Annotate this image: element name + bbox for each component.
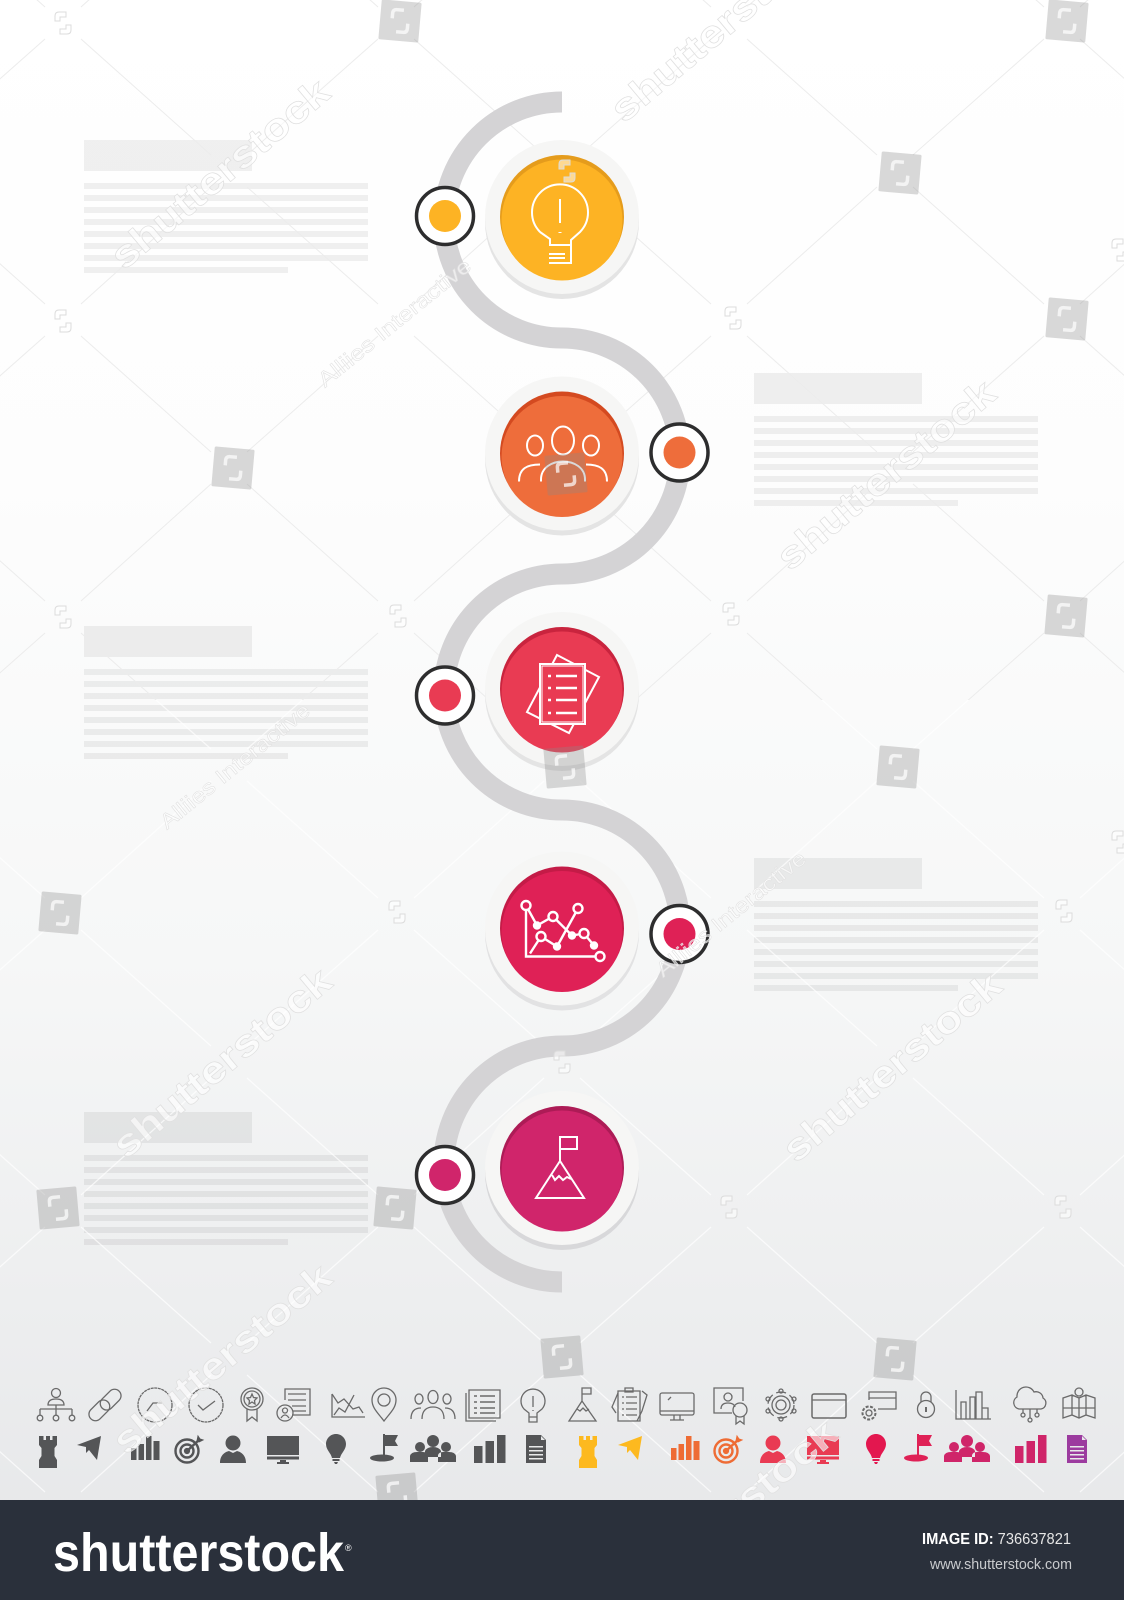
icon: bulb outline xyxy=(521,1389,545,1422)
icon: bar chart outline xyxy=(956,1390,991,1419)
icon: link xyxy=(86,1387,124,1423)
icon: profile list xyxy=(277,1389,310,1421)
watermark text: Alliies Interactive xyxy=(156,699,315,834)
marker 3 xyxy=(416,667,474,724)
icon: gear xyxy=(766,1389,796,1421)
step 4: chart xyxy=(485,852,639,1010)
icon: team magenta xyxy=(944,1435,990,1462)
watermark text: Alliies Interactive xyxy=(314,254,476,392)
watermark hooks xyxy=(55,12,1124,1218)
icon: award xyxy=(241,1388,263,1421)
icon: bars orange xyxy=(671,1436,700,1460)
icon: documents xyxy=(527,655,599,733)
icon: team outline xyxy=(411,1390,455,1419)
winding timeline path xyxy=(444,102,680,1282)
icon: plane yellow xyxy=(618,1436,642,1460)
icon: browser gear xyxy=(862,1392,896,1420)
watermark text: shutterstock xyxy=(105,959,341,1167)
icon: flag xyxy=(370,1434,398,1462)
step 1: idea xyxy=(485,140,639,299)
text placeholder 2 xyxy=(754,373,1038,506)
icon: location pin xyxy=(372,1388,396,1421)
icon: lightbulb xyxy=(532,184,588,263)
icon: bars xyxy=(131,1436,160,1460)
watermark text: shutterstock xyxy=(775,963,1011,1171)
icon: list pages xyxy=(466,1390,500,1421)
icon: trend circle xyxy=(138,1388,172,1422)
icon: browser xyxy=(812,1394,846,1418)
footer bar xyxy=(0,1500,1124,1600)
step 2: team xyxy=(485,376,639,536)
icon: document purple xyxy=(1067,1435,1087,1463)
icon: clipboard xyxy=(612,1388,647,1421)
icon: bulb red xyxy=(866,1434,886,1464)
footer logo: ® xyxy=(345,1543,352,1553)
watermark text: Alliies Interactive xyxy=(652,847,811,982)
icon: line chart xyxy=(522,901,604,961)
icon: lock xyxy=(918,1392,934,1418)
icon: document xyxy=(526,1435,546,1463)
icon: cloud network xyxy=(1014,1387,1046,1422)
coloured icon row xyxy=(579,1434,1087,1468)
icon: tower yellow xyxy=(579,1436,597,1468)
icon: target xyxy=(176,1436,203,1462)
icon: person red xyxy=(760,1436,786,1463)
icon: mountain flag xyxy=(536,1137,584,1198)
icon: monitor red xyxy=(807,1436,839,1464)
icon: mountain flag outline xyxy=(569,1388,596,1421)
watermark text: shutterstock xyxy=(769,371,1005,579)
marker 2 xyxy=(651,424,708,481)
marker 4 xyxy=(651,906,708,962)
icon: user certificate xyxy=(714,1388,747,1424)
icon: team xyxy=(410,1435,456,1462)
icon: monitor xyxy=(267,1436,299,1464)
icon: tower xyxy=(39,1436,57,1468)
step 3: documents xyxy=(485,612,639,771)
icon: org chart xyxy=(37,1388,75,1421)
image id: IMAGE ID: 736637821 xyxy=(922,1531,1071,1548)
outline icon row xyxy=(37,1387,1095,1424)
text placeholder 5 xyxy=(84,1112,368,1245)
solid grey icon row xyxy=(39,1434,546,1468)
icon: person xyxy=(220,1436,246,1463)
text placeholder 1 xyxy=(84,140,368,273)
text placeholder 3 xyxy=(84,626,368,759)
icon: flag red xyxy=(904,1434,932,1462)
watermark text: shutterstock xyxy=(105,1255,341,1463)
icon: three bars xyxy=(474,1435,506,1463)
marker 1 xyxy=(416,188,474,244)
footer logo: shutterstock xyxy=(53,1523,345,1583)
icon: map xyxy=(1063,1388,1095,1418)
icon: paper plane xyxy=(77,1436,101,1460)
step 5: goal xyxy=(485,1091,639,1250)
icon: desktop xyxy=(660,1393,694,1420)
icon: team xyxy=(519,426,607,482)
icon: check circle xyxy=(189,1388,223,1422)
watermark text: shutterstock xyxy=(103,70,339,278)
icon: target orange xyxy=(714,1436,742,1462)
website: www.shutterstock.com xyxy=(929,1556,1072,1573)
text placeholder 4 xyxy=(754,858,1038,991)
icon: line chart xyxy=(332,1394,365,1417)
icon: bulb xyxy=(326,1434,346,1464)
marker 5 xyxy=(416,1146,474,1204)
icon: bars magenta xyxy=(1015,1435,1046,1463)
